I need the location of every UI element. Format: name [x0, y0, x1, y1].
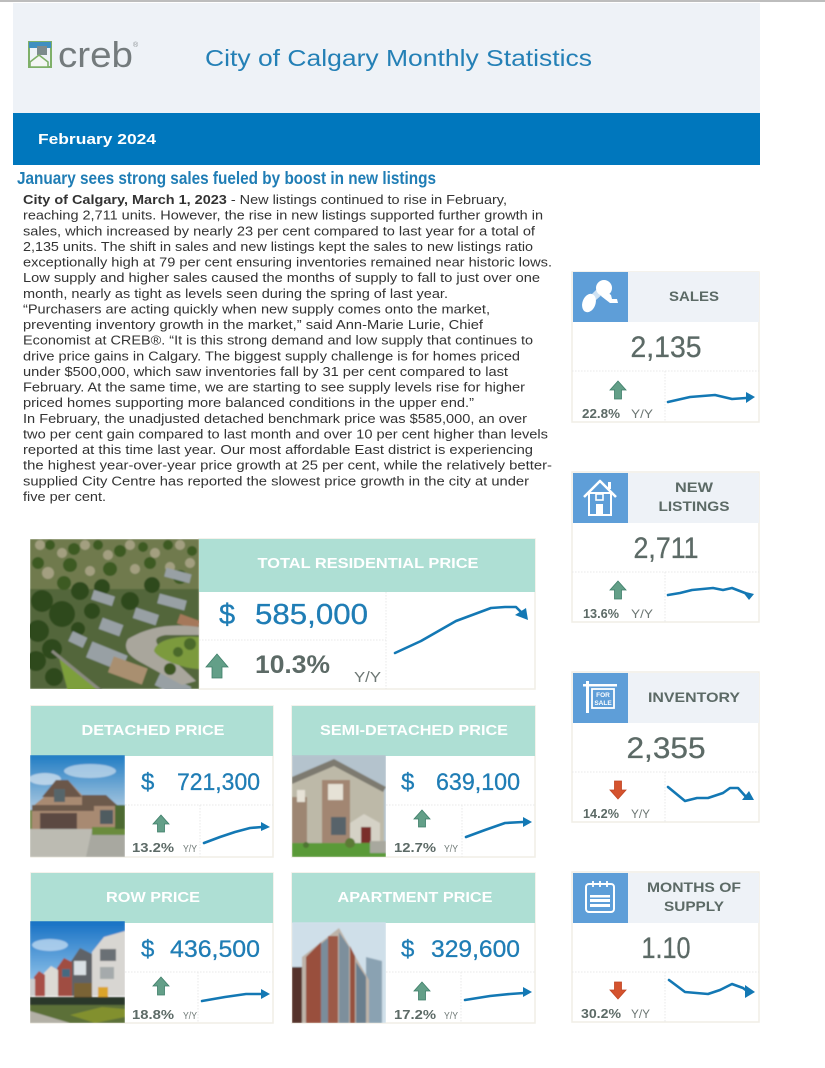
trend chart — [202, 989, 270, 1001]
change value — [132, 840, 197, 855]
panel: inventory — [572, 672, 759, 822]
trend chart — [668, 392, 755, 403]
change value — [132, 1007, 197, 1022]
value: 2,711 — [634, 532, 698, 565]
price value: $ — [141, 769, 154, 796]
photo: detached house — [30, 755, 125, 857]
panel heading: DETACHED PRICE — [82, 723, 225, 739]
change value — [255, 651, 381, 686]
price value: $ — [219, 599, 235, 631]
article body text: sales, which increased by nearly 23 per cent compared to last year for a total of — [23, 223, 535, 238]
icon: down arrow — [610, 781, 626, 799]
icon: for sale sign: SALE — [594, 700, 612, 707]
change value: 12.7% — [394, 840, 436, 855]
trend chart — [668, 588, 754, 600]
panel: total residential price — [26, 539, 535, 700]
trend chart — [668, 787, 754, 801]
article body text: reported at this time last year. Our most affordable East district is experiencing — [23, 442, 533, 457]
icon: up arrow — [414, 810, 430, 827]
label: SUPPLY — [664, 898, 725, 914]
price value — [401, 769, 520, 796]
panel heading: APARTMENT PRICE — [338, 890, 493, 906]
trend chart — [204, 822, 270, 843]
label: SALES — [669, 288, 719, 304]
article body text: preventing inventory growth in the market,” said Ann-Marie Lurie, Chief — [23, 317, 483, 332]
article body text: “Purchasers are acting quickly when new supply comes onto the market, — [23, 301, 490, 316]
date band: February 2024 — [38, 131, 157, 148]
change value — [583, 806, 650, 821]
icon: down arrow — [610, 982, 626, 999]
article body text: 2,135 units. The shift in sales and new listings kept the sales to new listings ratio — [23, 239, 533, 254]
change value: Y/Y — [631, 1007, 650, 1021]
panel: apartment price — [292, 873, 535, 1023]
change value: 30.2% — [581, 1006, 621, 1021]
panel: sales — [572, 272, 759, 422]
label — [628, 873, 759, 923]
change value: Y/Y — [444, 1011, 458, 1022]
panel: row price — [30, 873, 273, 1023]
title: City of Calgary Monthly Statistics — [205, 45, 592, 71]
change value: 13.2% — [132, 840, 174, 855]
panel: detached price — [29, 706, 273, 857]
logo: creb: creb — [58, 34, 133, 75]
icon: house — [573, 473, 628, 523]
trend chart — [465, 987, 532, 1000]
change value: Y/Y — [631, 407, 653, 421]
icon: up arrow — [206, 654, 228, 678]
article body text — [23, 192, 552, 504]
icon: for sale sign: FOR — [596, 692, 610, 699]
article body text: month, nearly as tight as levels seen during the spring of last year. — [23, 286, 448, 301]
icon: keys — [573, 272, 628, 322]
icon: up arrow — [610, 381, 626, 399]
panel heading — [199, 539, 535, 592]
panel heading: ROW PRICE — [106, 890, 200, 906]
panel: semi-detached price — [292, 706, 535, 857]
change value: Y/Y — [183, 1011, 197, 1022]
change value: 18.8% — [132, 1007, 174, 1022]
panel heading: TOTAL RESIDENTIAL PRICE — [258, 556, 479, 572]
change value: Y/Y — [631, 607, 653, 621]
price value: $ — [401, 936, 414, 963]
article body text: five per cent. — [23, 489, 106, 504]
trend chart — [395, 607, 528, 653]
label — [628, 673, 759, 723]
article body text: Economist at CREB®. “It is this strong demand and low supply that continues to — [23, 333, 533, 348]
icon: up arrow — [153, 977, 169, 995]
change value — [583, 606, 653, 621]
change value: 22.8% — [582, 406, 620, 421]
logo: creb — [29, 34, 139, 75]
change value — [394, 840, 458, 855]
change value: 10.3% — [255, 651, 330, 679]
photo: aerial neighbourhood — [30, 539, 199, 689]
change value — [582, 406, 653, 421]
trend chart — [669, 980, 755, 998]
panel: new listings — [572, 472, 759, 622]
value: 2,135 — [630, 331, 702, 364]
icon: calendar — [573, 873, 628, 923]
value: 1.10 — [642, 932, 690, 965]
change value: Y/Y — [183, 844, 197, 855]
change value: 17.2% — [394, 1007, 436, 1022]
value: 2,355 — [626, 732, 706, 765]
article body text: priced homes supporting more balanced conditions in the upper end.” — [23, 395, 474, 410]
price value: 639,100 — [436, 769, 520, 796]
price value — [141, 769, 260, 796]
article body text: two per cent gain compared to last month and over 10 per cent higher than levels — [23, 426, 548, 441]
article body text: under $500,000, which saw inventories fall by 31 per cent compared to last — [23, 364, 508, 379]
label: LISTINGS — [658, 498, 730, 514]
article body text: exceptionally high at 79 per cent ensuring inventories remained near historic lows. — [23, 254, 552, 270]
icon: up arrow — [153, 815, 169, 832]
icon: up arrow — [414, 982, 430, 1000]
panel: months of supply — [572, 872, 759, 1022]
change value: Y/Y — [354, 669, 381, 686]
article body text: In February, the unadjusted detached benchmark price was $585,000, an over — [23, 411, 528, 426]
photo: apartment tower — [292, 922, 386, 1023]
header panel — [13, 3, 760, 113]
panel heading — [31, 873, 273, 923]
logo: creb: ® — [133, 41, 139, 49]
article body text: City of Calgary, March 1, 2023 - New listings continued to rise in February, — [23, 192, 507, 207]
change value: Y/Y — [631, 807, 650, 821]
change value: 13.6% — [583, 606, 619, 621]
price value: 329,600 — [431, 936, 520, 963]
label: NEW — [675, 479, 714, 495]
article body text: the highest year-over-year price growth at 25 per cent, while the relatively better- — [23, 458, 552, 473]
photo: semi-detached house — [292, 755, 386, 857]
photo: row houses — [30, 921, 125, 1023]
date band — [13, 113, 760, 165]
price value: 436,500 — [170, 936, 260, 963]
icon: for sale sign — [573, 673, 628, 723]
change value: 14.2% — [583, 806, 619, 821]
price value: $ — [401, 769, 414, 796]
article body text: supplied City Centre has reported the slowest price growth in the city at under — [23, 473, 530, 488]
label: MONTHS OF — [647, 879, 741, 895]
article body text: drive price gains in Calgary. The biggest supply challenge is for homes priced — [23, 348, 520, 363]
panel heading — [31, 706, 273, 756]
label: INVENTORY — [648, 689, 741, 705]
panel heading — [292, 873, 535, 923]
price value: 585,000 — [255, 599, 368, 631]
article body text: reaching 2,711 units. However, the rise in new listings supported further growth in — [23, 208, 543, 223]
article body text: February. At the same time, we are starting to see supply levels rise for higher — [23, 380, 526, 395]
headline: January sees strong sales fueled by boost in new listings — [17, 168, 436, 188]
price value: 721,300 — [177, 769, 260, 796]
label — [628, 473, 759, 523]
change value: Y/Y — [444, 844, 458, 855]
trend chart — [466, 817, 532, 837]
change value — [581, 1006, 650, 1021]
price value: $ — [141, 936, 154, 963]
panel heading — [292, 706, 535, 756]
panel heading: SEMI-DETACHED PRICE — [320, 723, 508, 739]
article body text: Low supply and higher sales caused the months of supply to fall to just over one — [23, 270, 540, 285]
change value — [394, 1007, 458, 1022]
label — [628, 272, 759, 322]
icon: up arrow — [610, 581, 626, 599]
